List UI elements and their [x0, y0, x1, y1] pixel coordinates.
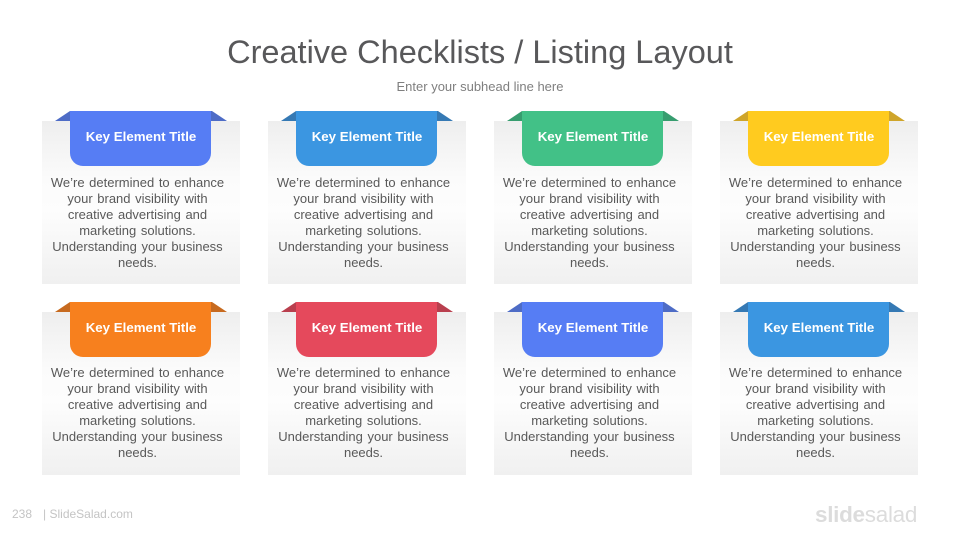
text 1: your brand visibility with	[67, 191, 208, 206]
text 7: needs.	[570, 445, 609, 460]
text 2: Understanding your business	[278, 239, 449, 254]
ribbon 2 title: Key Element Title	[312, 129, 422, 144]
text 8: marketing solutions.	[757, 413, 874, 428]
panel: card 1 blue	[42, 111, 240, 284]
logo wordmark: slidesalad	[815, 502, 917, 527]
ribbon 4 title	[748, 111, 889, 166]
ribbon 3 title: Key Element Title	[538, 129, 648, 144]
text 3: your brand visibility with	[519, 191, 660, 206]
text 3: We’re determined to enhance	[503, 175, 676, 190]
fold 7	[507, 302, 679, 312]
text 1: marketing solutions.	[79, 223, 196, 238]
text 4: needs.	[796, 255, 835, 270]
text 4: creative advertising and	[746, 207, 885, 222]
text 4	[729, 175, 902, 270]
text 8: creative advertising and	[746, 397, 885, 412]
text 6: marketing solutions.	[305, 413, 422, 428]
text 5: marketing solutions.	[79, 413, 196, 428]
text 6: Understanding your business	[278, 429, 449, 444]
text 5: Understanding your business	[52, 429, 223, 444]
ribbon 5 title: Key Element Title	[86, 320, 196, 335]
text 1: needs.	[118, 255, 157, 270]
text 7	[503, 365, 676, 460]
text 6	[277, 365, 450, 460]
panel: card 2 sky blue	[268, 111, 466, 284]
fold 5	[55, 302, 227, 312]
text 8: your brand visibility with	[745, 381, 886, 396]
ribbon 8 title	[748, 302, 889, 357]
text 3: needs.	[570, 255, 609, 270]
panel: card 8 sky blue	[720, 302, 918, 475]
ribbon 7 title	[522, 302, 663, 357]
panel: card 5 orange	[42, 302, 240, 475]
text 7: We’re determined to enhance	[503, 365, 676, 380]
panel: card 6 red	[268, 302, 466, 475]
fold 3	[507, 111, 679, 121]
ribbon 1 title: Key Element Title	[86, 129, 196, 144]
text 3	[503, 175, 676, 270]
text 2: creative advertising and	[294, 207, 433, 222]
panel: card 3 green	[494, 111, 692, 284]
text 5: needs.	[118, 445, 157, 460]
text 2: marketing solutions.	[305, 223, 422, 238]
page number and site: 238 | SlideSalad.com	[12, 507, 133, 521]
text 8	[729, 365, 902, 460]
panel: card 4 yellow	[720, 111, 918, 284]
ribbon 4 title: Key Element Title	[764, 129, 874, 144]
panel: card 7 blue	[494, 302, 692, 475]
text 8: needs.	[796, 445, 835, 460]
text 2: your brand visibility with	[293, 191, 434, 206]
fold 1	[55, 111, 227, 121]
text 4: marketing solutions.	[757, 223, 874, 238]
fold 6	[281, 302, 453, 312]
text 1	[51, 175, 224, 270]
text 5: We’re determined to enhance	[51, 365, 224, 380]
text 7: Understanding your business	[504, 429, 675, 444]
text 6: needs.	[344, 445, 383, 460]
text 6: your brand visibility with	[293, 381, 434, 396]
ribbon 1 title	[70, 111, 211, 166]
text 3: Understanding your business	[504, 239, 675, 254]
ribbon 7 title: Key Element Title	[538, 320, 648, 335]
text 5	[51, 365, 224, 460]
subheading: Enter your subhead line here	[397, 79, 563, 94]
text 4: Understanding your business	[730, 239, 901, 254]
text 3: creative advertising and	[520, 207, 659, 222]
text 8: Understanding your business	[730, 429, 901, 444]
text 4: your brand visibility with	[745, 191, 886, 206]
ribbon 6 title	[296, 302, 437, 357]
fold 2	[281, 111, 453, 121]
text 3: marketing solutions.	[531, 223, 648, 238]
ribbon 6 title: Key Element Title	[312, 320, 422, 335]
text 7: creative advertising and	[520, 397, 659, 412]
text 1: creative advertising and	[68, 207, 207, 222]
text 6: We’re determined to enhance	[277, 365, 450, 380]
ribbon 3 title	[522, 111, 663, 166]
text 6: creative advertising and	[294, 397, 433, 412]
fold 4	[733, 111, 905, 121]
text 2: We’re determined to enhance	[277, 175, 450, 190]
text 7: marketing solutions.	[531, 413, 648, 428]
text 5: creative advertising and	[68, 397, 207, 412]
text 2	[277, 175, 450, 270]
ribbon 5 title	[70, 302, 211, 357]
fold 8	[733, 302, 905, 312]
text 1: Understanding your business	[52, 239, 223, 254]
text 1: We’re determined to enhance	[51, 175, 224, 190]
text 2: needs.	[344, 255, 383, 270]
text 4: We’re determined to enhance	[729, 175, 902, 190]
ribbon 2 title	[296, 111, 437, 166]
text 5: your brand visibility with	[67, 381, 208, 396]
text 8: We’re determined to enhance	[729, 365, 902, 380]
ribbon 8 title: Key Element Title	[764, 320, 874, 335]
title: Creative Checklists / Listing Layout	[227, 34, 733, 70]
text 7: your brand visibility with	[519, 381, 660, 396]
